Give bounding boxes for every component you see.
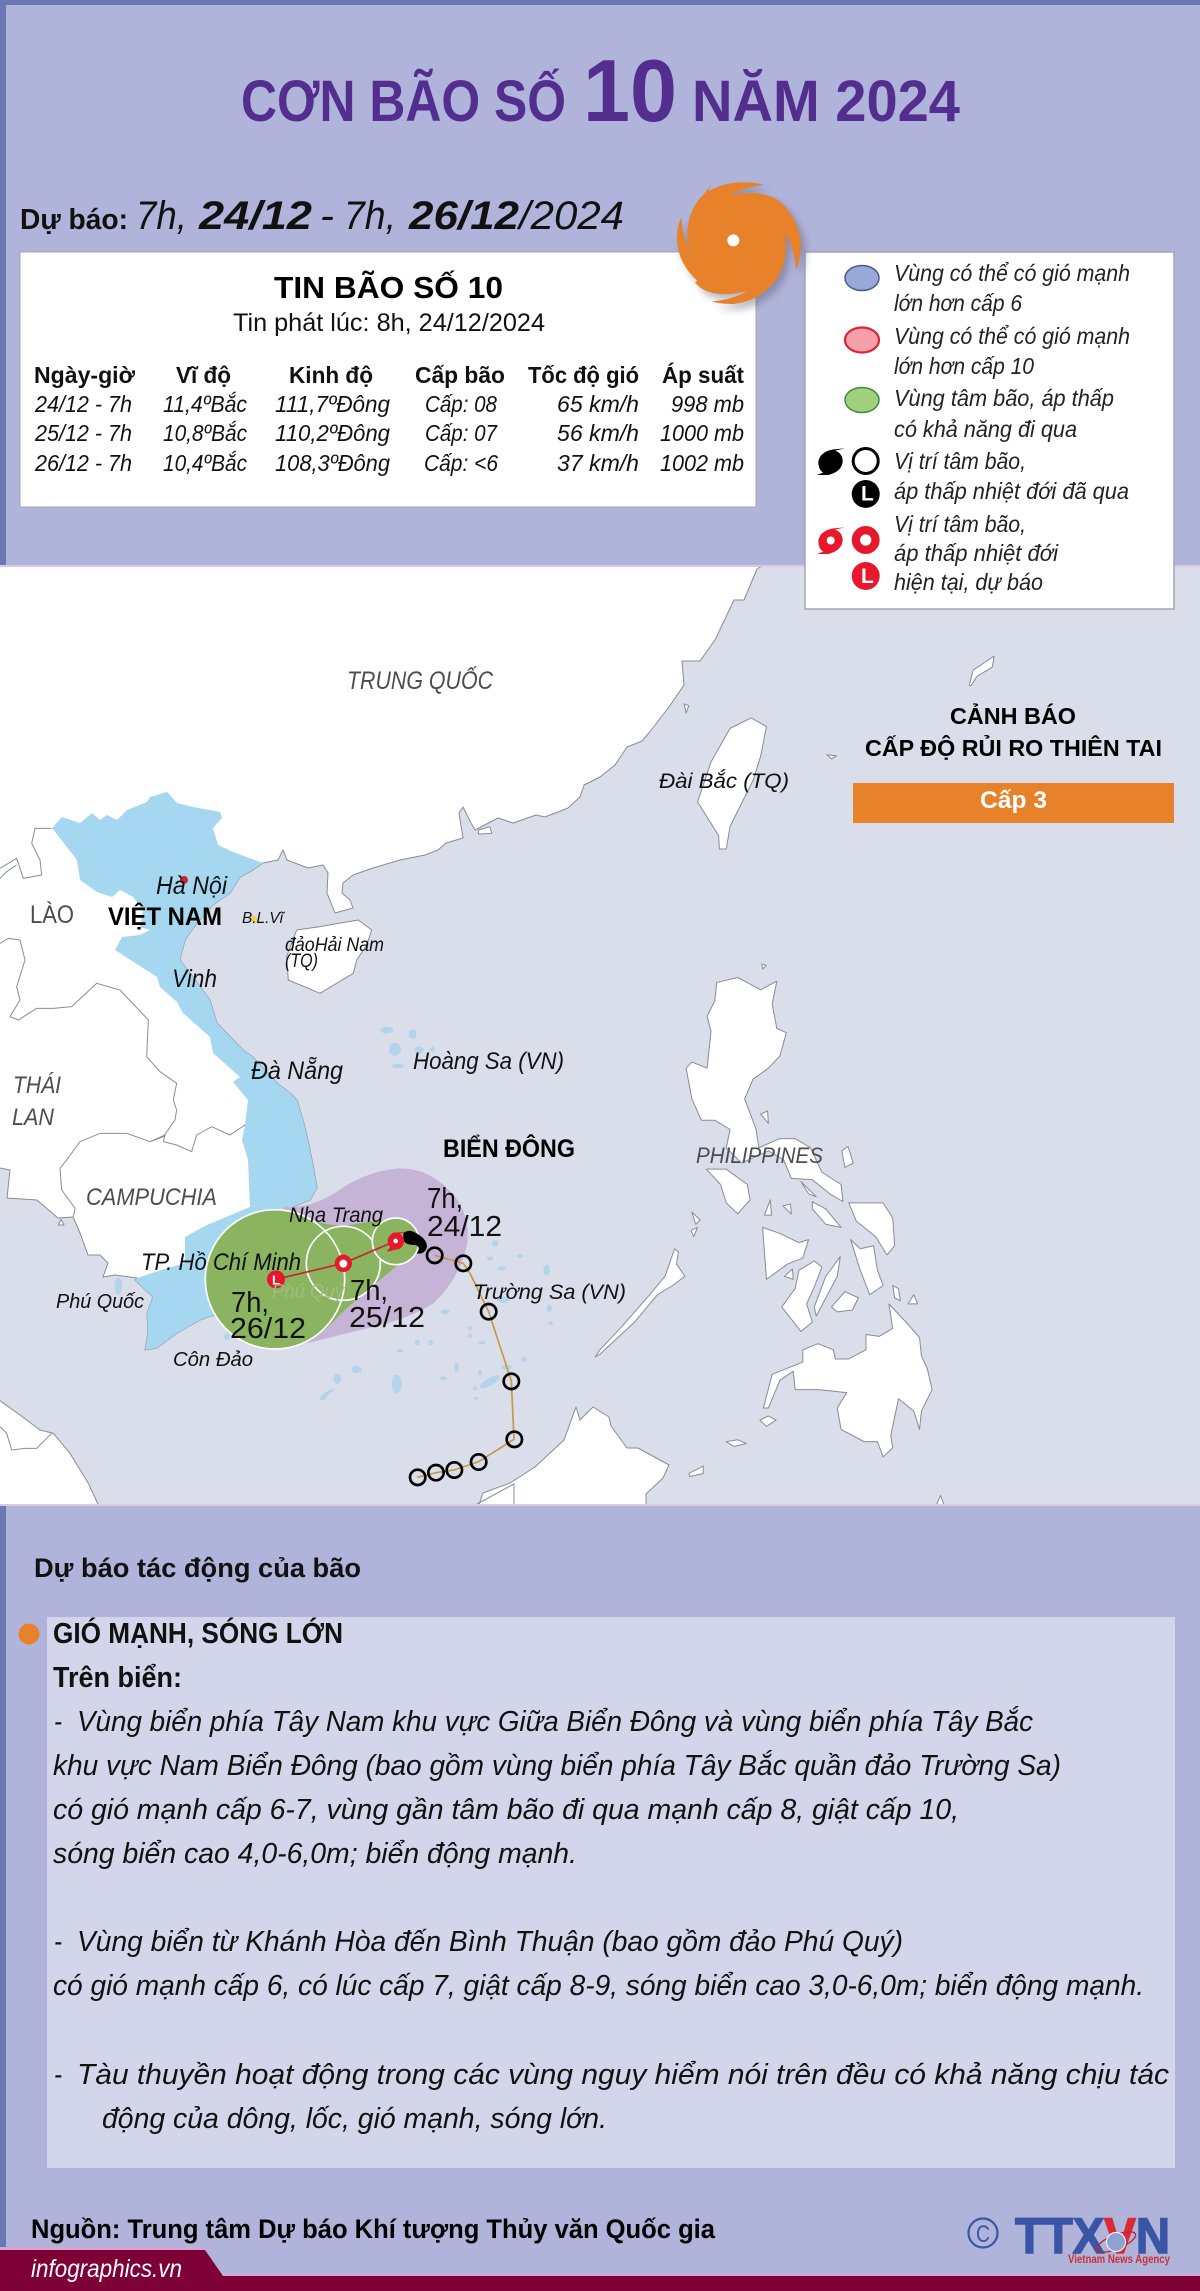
map labels: Nha Trang [289,1204,383,1227]
table rows: 56 km/h [557,420,639,446]
legend item: current and forecast positions: hiện tại, dự báo [894,569,1043,595]
title [241,41,960,140]
islands: Spratly group [319,1240,553,1401]
legend item: past positions: áp thấp nhiệt đới đã qua [894,478,1129,504]
text box: wind and waves: Trên biển: [53,1662,182,1694]
table rows: 1002 mb [660,450,744,476]
borders in the south [0,1100,245,1505]
table rows: 111,7ºĐông [275,391,390,417]
forecast period: 7h, [344,194,396,238]
table rows: 24/12 - 7h [34,391,132,417]
map labels: 7h, [427,1183,463,1215]
forecast period: 24/12 [198,194,312,238]
table rows: Cấp: 08 [425,391,497,417]
legend item: storm centre area: Vùng tâm bão, áp thấp [894,385,1114,411]
map labels: TP. Hồ Chí Minh [141,1249,301,1276]
map labels: Đà Nẵng [251,1056,343,1085]
legend item: wind above level 6: lớn hơn cấp 6 [894,290,1022,316]
map labels: THÁI [13,1072,61,1099]
forecast marker 25/12 [335,1255,352,1272]
map labels: 25/12 [349,1302,425,1334]
small coastal island [390,827,492,1068]
table rows: 1000 mb [660,420,744,446]
text box: wind and waves: Vùng biển từ Khánh Hòa đến Bình Thuận (bao gồm đảo Phú Quý) [77,1926,903,1958]
map labels: Côn Đảo [173,1349,253,1371]
text box: wind and waves: có gió mạnh cấp 6, có lúc cấp 7, giật cấp 8-9, sóng biển cao 3,0-6,0m; biển động mạnh. [53,1970,1144,2002]
map labels: CAMPUCHIA [86,1184,217,1211]
map labels: LÀO [30,900,74,929]
legend item: storm centre area: có khả năng đi qua [894,416,1077,442]
text box: wind and waves: Tàu thuyền hoạt động trong các vùng nguy hiểm nói trên đều có khả năng chịu tác [77,2059,1170,2091]
map labels: Hà Nội [156,872,228,900]
text box: wind and waves: động của dông, lốc, gió mạnh, sóng lớn. [102,2103,607,2135]
legend item: wind above level 10: lớn hơn cấp 10 [894,353,1034,379]
map labels: B.L.Vĩ [242,910,285,927]
legend item: wind above level 6 [845,260,1130,316]
forecast period: 26/12 [408,194,519,238]
logo: TTXVN: TTXVN [1015,2208,1170,2264]
table header [34,361,744,388]
legend item: past positions: L [861,482,874,506]
footer band: infographics.vn [31,2255,182,2283]
table header: Kinh độ [289,362,373,388]
forecast track [276,1241,396,1279]
legend item: wind above level 10 [845,323,1130,379]
table rows: 10,4ºBắc [163,450,247,476]
islands: Taiwan and Philippines [595,656,994,1506]
legend item: current and forecast positions: áp thấp nhiệt đới [894,540,1059,566]
map labels: Hoàng Sa (VN) [413,1048,564,1075]
map labels: 7h, [231,1287,269,1319]
table rows: 110,2ºĐông [275,420,390,446]
logo: TTXVN: Vietnam News Agency [1068,2252,1170,2266]
forecast marker 24/12 [387,1232,408,1252]
map labels: (TQ) [285,951,318,972]
map panel [0,566,1200,1510]
legend item: current and forecast positions [817,511,1059,595]
table header: Áp suất [662,361,744,388]
map labels: Vinh [172,965,217,993]
table rows: 108,3ºĐông [275,450,390,476]
map labels: 26/12 [230,1313,306,1345]
map labels: PHILIPPINES [696,1143,823,1168]
map labels: VIỆT NAM [108,901,222,931]
past track [417,1255,514,1477]
warning: disaster risk level: CẢNH BÁO [950,701,1076,729]
panel: legend [805,252,1174,609]
legend item: wind above level 10: Vùng có thể có gió mạnh [894,323,1130,349]
legend item: current and forecast positions: L [861,565,874,588]
table rows: Cấp: 07 [425,420,498,446]
table rows: 65 km/h [557,391,639,417]
footer band [0,2247,1200,2291]
table header: Vĩ độ [176,362,231,388]
panel: storm bulletin table [20,252,756,507]
forecast period [20,194,624,238]
text box: wind and waves: - [54,1706,62,1738]
text box: wind and waves [18,1616,1175,2168]
logo: TTXVN: C [976,2221,990,2248]
map labels: TRUNG QUỐC [347,665,494,695]
text box: wind and waves: khu vực Nam Biển Đông (bao gồm vùng biển phía Tây Bắc quần đảo Trường Sa) [53,1749,1061,1782]
map labels: 24/12 [427,1211,502,1243]
table rows: 998 mb [671,391,744,417]
icon: orange storm [677,182,806,309]
storm centre cone [275,1209,417,1349]
forecast marker 26/12 [267,1270,285,1288]
text box: wind and waves: sóng biển cao 4,0-6,0m; biển động mạnh. [53,1838,577,1870]
text box: wind and waves: Vùng biển phía Tây Nam khu vực Giữa Biển Đông và vùng biển phía Tây Bắc [77,1705,1033,1738]
text box: wind and waves: - [54,1926,62,1958]
table rows: 26/12 - 7h [34,450,132,476]
warning: disaster risk level: CẤP ĐỘ RỦI RO THIÊN TAI [865,733,1162,761]
heading: impact: Dự báo tác động của bão [34,1553,361,1583]
issue time: Tin phát lúc: 8h, 24/12/2024 [233,309,545,337]
past positions [410,1248,522,1485]
map labels: đảoHải Nam [285,935,384,956]
warning: disaster risk level: Cấp 3 [980,787,1047,814]
table rows: 11,4ºBắc [163,391,247,417]
map labels: Phú Quốc [56,1291,144,1313]
storm forecast area and track [205,1168,553,1485]
islands: Borneo [477,1407,669,1510]
legend item: storm centre area [845,385,1114,442]
text box: wind and waves: có gió mạnh cấp 6-7, vùng gần tâm bão đi qua mạnh cấp 8, giật cấp 10, [53,1794,959,1826]
warning: disaster risk level [853,701,1174,823]
legend item: past positions [817,448,1129,508]
title: 10 [583,41,677,140]
table header: Tốc độ gió [528,362,639,388]
panel: impact forecast [0,1504,1200,2291]
map labels: 7h, [350,1275,388,1307]
forecast period: - [320,194,334,238]
table header: Cấp bão [415,362,505,388]
table rows: 10,8ºBắc [163,420,247,446]
legend item: current and forecast positions: Vị trí tâm bão, [894,511,1026,537]
table rows: 37 km/h [557,450,639,476]
map labels: Đài Bắc (TQ) [659,770,789,793]
top border [0,0,1200,566]
map labels: Phú Quý [272,1281,345,1303]
map labels [12,665,823,1371]
forecast period: Dự báo: [20,204,128,236]
map labels: Trường Sa (VN) [473,1281,626,1304]
map labels: BIỂN ĐÔNG [443,1133,575,1163]
strong wind area [267,1168,468,1343]
title: CƠN BÃO SỐ [241,69,566,134]
land: mainland Asia [0,566,762,1350]
legend item: wind above level 6: Vùng có thể có gió mạnh [894,260,1130,286]
text box: wind and waves: GIÓ MẠNH, SÓNG LỚN [53,1616,343,1650]
forecast marker 26/12: L [272,1272,280,1287]
source: Nguồn: Trung tâm Dự báo Khí tượng Thủy văn Quốc gia [31,2214,716,2244]
legend item: past positions: Vị trí tâm bão, [894,448,1026,474]
table header: Ngày-giờ [34,362,136,388]
forecast period: /2024 [516,194,624,238]
borders in the north [0,828,401,1100]
title: NĂM 2024 [692,69,960,134]
table rows: Cấp: <6 [424,450,498,476]
table rows [34,391,744,476]
land: Vietnam [52,792,317,1350]
map labels: LAN [12,1104,55,1131]
current storm position black [403,1231,427,1254]
heading: bulletin: TIN BÃO SỐ 10 [274,269,503,305]
text box: wind and waves: - [54,2059,62,2091]
forecast period: 7h, [136,194,187,238]
table rows: 25/12 - 7h [34,420,132,446]
